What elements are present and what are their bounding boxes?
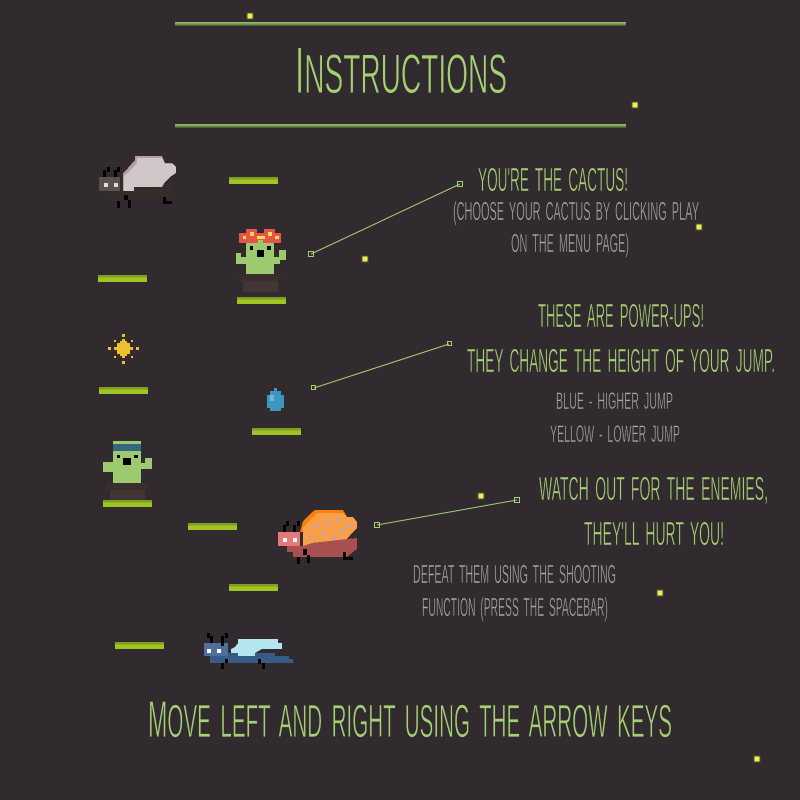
icon: yellow sun power-up [108,334,139,364]
text block: enemies [413,470,768,622]
icon: blue dragonfly enemy [204,633,293,669]
platforms [98,177,301,649]
icon: cactus with blue headband [103,441,152,500]
arrow: enemy connector [374,498,520,528]
title: INSTRUCTIONS [295,33,507,107]
text block: cactus: ON THE MENU PAGE) [511,228,629,258]
icon: orange butterfly enemy [278,510,357,564]
title rule top [175,22,626,26]
title rule bottom [175,124,626,128]
text block: power-ups [467,297,775,448]
yellow square particles [247,13,760,762]
icon: cactus with flower crown [236,229,286,292]
arrow: power-up connector [312,342,452,390]
icon: blue water drop power-up [267,388,284,411]
text block: cactus [453,161,699,258]
arrow: cactus connector [308,182,462,256]
icon: grey fly enemy [99,156,176,208]
